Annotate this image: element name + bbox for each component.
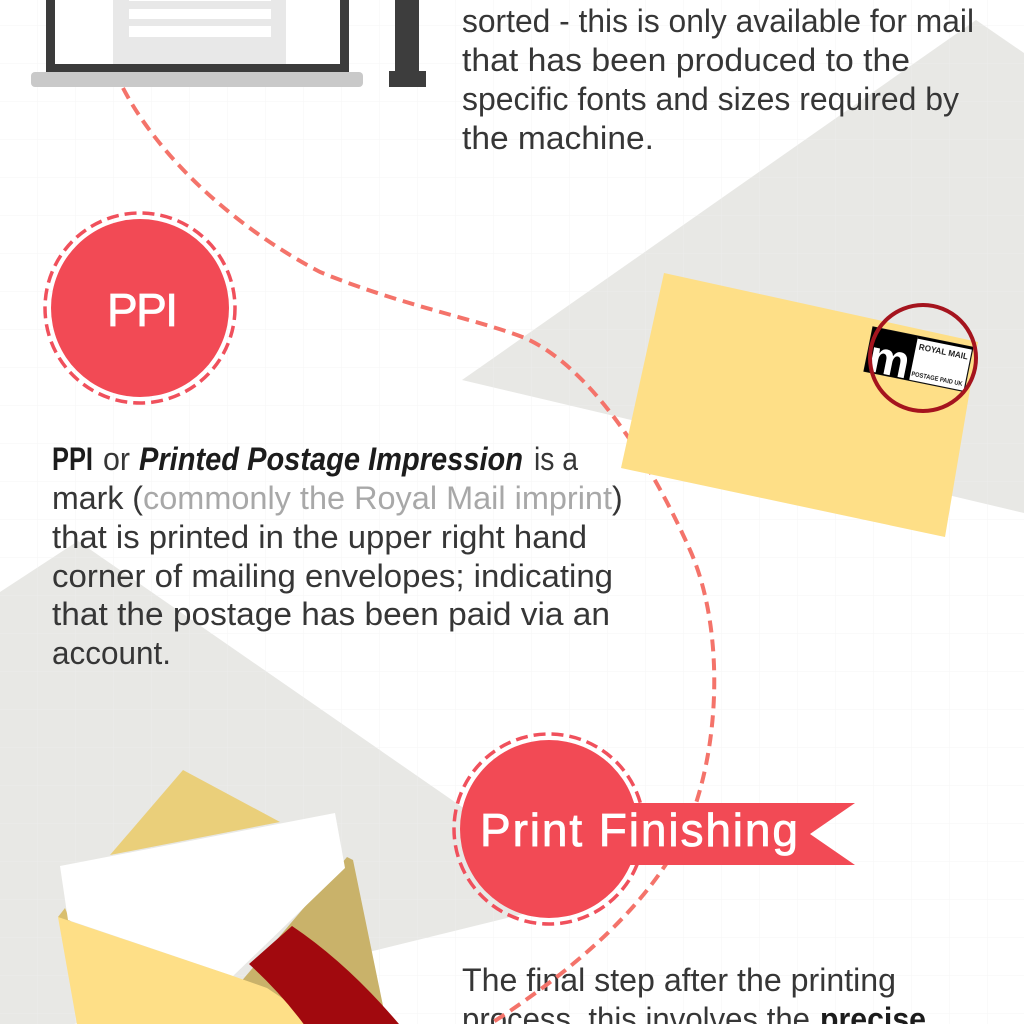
text block: PPI description: ): [612, 480, 623, 516]
badge: Print Finishing: Print Finishing: [480, 804, 798, 856]
icon: Royal Mail imprint: ROYAL MAIL: [918, 342, 969, 361]
icon: Royal Mail imprint: m: [864, 329, 915, 388]
text block: PPI description: commonly the Royal Mail imprint: [143, 480, 612, 516]
icon: Royal Mail imprint: POSTAGE PAID UK: [911, 371, 963, 388]
text block: PPI description: [52, 441, 623, 671]
text block: PPI description: corner of mailing envelopes; indicating: [52, 558, 613, 594]
icon: open envelope with letter: [58, 770, 404, 1024]
text block: sorting description: the machine.: [462, 120, 654, 156]
icon: laptop: [31, 0, 363, 87]
grey triangle: upper right: [462, 20, 1024, 513]
text block: PPI description: PPI: [52, 441, 93, 477]
icon: dark stand: [389, 0, 426, 87]
text block: sorting description: [462, 3, 974, 156]
text block: sorting description: that has been produced to the: [462, 42, 910, 78]
text block: sorting description: sorted - this is only available for mail: [462, 3, 974, 39]
text block: PPI description: Printed Postage Impression: [139, 441, 523, 477]
text block: print finishing description: The final step after the printing: [462, 962, 896, 998]
text block: sorting description: specific fonts and sizes required by: [462, 81, 959, 117]
text block: PPI description: mark (: [52, 480, 143, 516]
text block: PPI description: or: [103, 441, 130, 477]
text block: PPI description: that the postage has been paid via an: [52, 596, 610, 632]
highlight ring: [870, 305, 976, 411]
dashed route line: [123, 88, 714, 1024]
grey triangle: lower left: [0, 541, 592, 1024]
icon: Royal Mail imprint: [862, 327, 973, 400]
badge: PPI: PPI: [107, 284, 178, 336]
badge: PPI: [45, 213, 235, 403]
text block: print finishing description: [462, 962, 926, 1024]
text block: PPI description: is a: [534, 441, 578, 477]
badge: Print Finishing: [454, 734, 855, 924]
text block: PPI description: account.: [52, 635, 171, 671]
text block: PPI description: that is printed in the upper right hand: [52, 519, 587, 555]
icon: envelope with postage mark: [621, 273, 978, 537]
